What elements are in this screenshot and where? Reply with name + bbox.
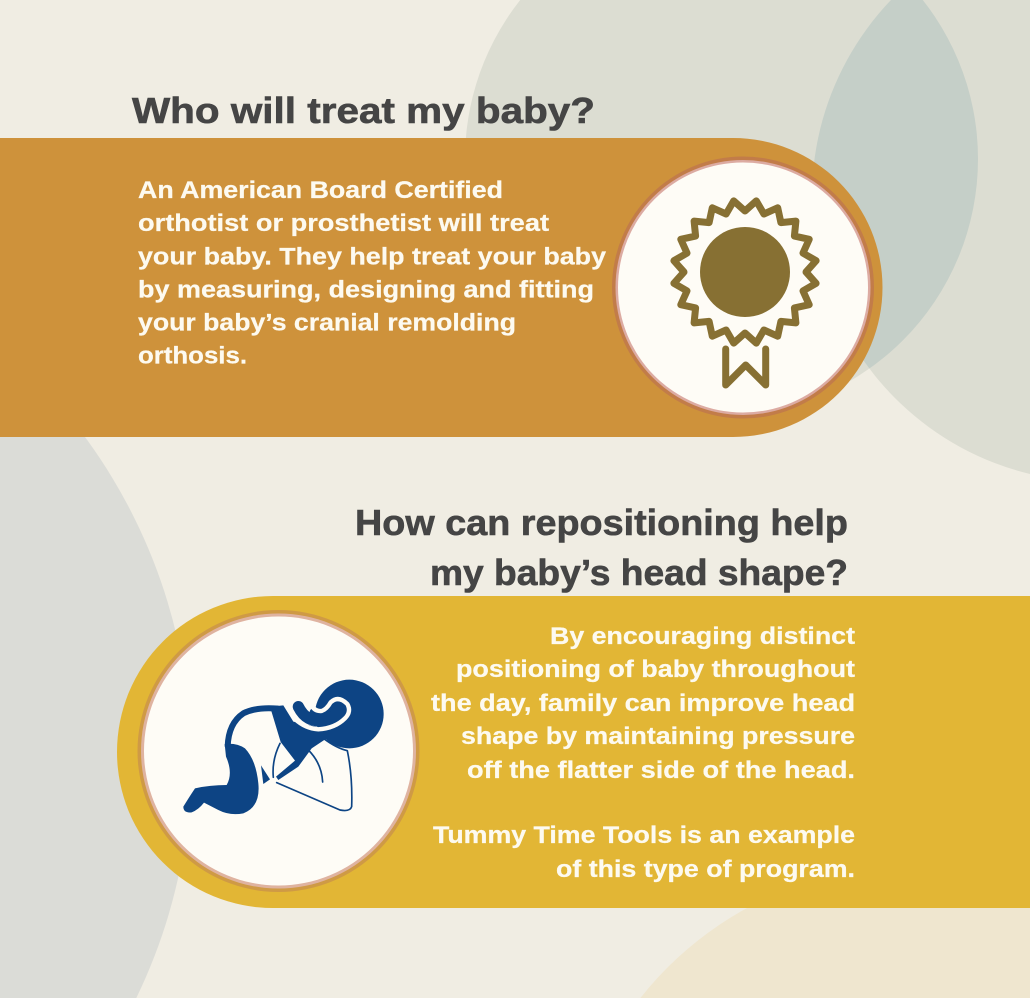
panel: who will treat my baby — [0, 138, 882, 437]
arm outline — [295, 699, 349, 729]
text block: repositioning description: the day, family can improve head — [431, 690, 855, 717]
pillow — [273, 738, 352, 811]
icon circle: baby on pillow — [138, 610, 420, 892]
text block: repositioning description: Tummy Time Tools is an example — [433, 822, 855, 849]
text block: repositioning description: off the flatter side of the head. — [467, 757, 855, 784]
text block: orthotist description: orthosis. — [138, 342, 247, 370]
text block: repositioning description: positioning of baby throughout — [456, 656, 855, 683]
orange band — [0, 138, 882, 437]
heading: how can repositioning help — [355, 502, 848, 593]
text block: orthotist description: An American Board Certified — [138, 177, 503, 204]
head — [315, 680, 384, 748]
text block: orthotist description — [138, 177, 607, 370]
torso — [270, 705, 333, 780]
heading: how can repositioning help: How can repositioning help — [355, 502, 848, 543]
text block: repositioning description: shape by maintaining pressure — [461, 723, 855, 750]
heading: how can repositioning help: my baby’s head shape? — [430, 552, 848, 593]
foot — [261, 765, 270, 784]
text block: repositioning description: of this type of program. — [556, 856, 855, 883]
arm — [298, 707, 338, 721]
icon: award rosette — [674, 201, 816, 385]
yellow band — [117, 596, 1030, 908]
text block: orthotist description: your baby. They help treat your baby — [138, 244, 607, 270]
text block: orthotist description: by measuring, designing and fitting — [138, 276, 594, 304]
text block: orthotist description: your baby’s cranial remolding — [138, 310, 516, 336]
text block: repositioning description — [431, 623, 855, 883]
heading: who will treat my baby: Who will treat my baby? — [132, 90, 595, 131]
icon circle: medal — [612, 156, 874, 418]
diaper outline — [228, 708, 278, 747]
icon: baby on pillow — [183, 680, 384, 814]
text block: repositioning description: By encouraging distinct — [550, 623, 855, 650]
panel: repositioning — [117, 596, 1030, 908]
leg — [183, 744, 259, 814]
text block: orthotist description: orthotist or prosthetist will treat — [138, 210, 549, 237]
